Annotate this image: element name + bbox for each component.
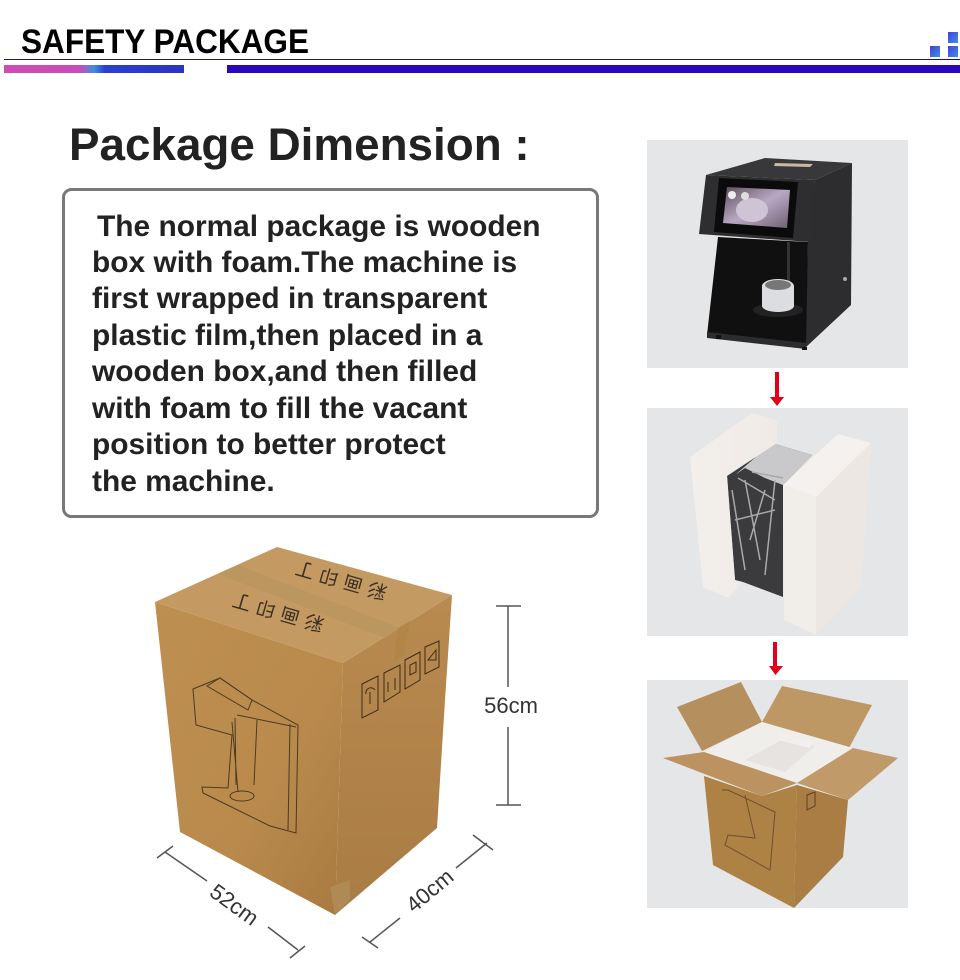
screen bezel	[714, 178, 798, 238]
top printing: 彩画印丁	[224, 586, 326, 635]
header: safety package	[4, 23, 960, 73]
foam block left	[690, 413, 777, 598]
icon: header squares	[930, 32, 958, 57]
top-left flap	[677, 682, 762, 751]
foam block right	[783, 434, 871, 635]
carton handling icons	[362, 641, 439, 718]
description text: position to better protect	[92, 428, 446, 461]
top-right flap	[762, 686, 872, 748]
machine body side	[805, 163, 852, 348]
description text	[91, 210, 540, 498]
description text: wooden box,and then filled	[91, 355, 477, 388]
description text: box with foam.The machine is	[92, 246, 517, 279]
print arm	[787, 242, 790, 287]
text panel: package description	[64, 190, 598, 516]
top printing	[224, 554, 389, 635]
carton icons	[807, 792, 815, 810]
description text: first wrapped in transparent	[92, 282, 487, 315]
header bar right	[227, 65, 960, 73]
dimension: depth 40cm	[362, 835, 493, 948]
carton machine drawing	[193, 678, 298, 833]
machine cavity	[707, 237, 808, 348]
photo panel: opened box	[647, 680, 908, 908]
closed carton	[155, 547, 452, 915]
header title: SAFETY PACKAGE	[21, 23, 309, 61]
label: 40cm: 40cm	[401, 864, 458, 917]
dimension: width 52cm	[157, 846, 305, 958]
carton right face	[335, 595, 452, 915]
machine top	[706, 158, 852, 180]
photo panel: foam	[647, 408, 908, 636]
top printing: 彩画印丁	[287, 554, 389, 603]
dimension: height 56cm	[484, 606, 538, 805]
packing tape	[218, 565, 400, 638]
screen	[723, 187, 790, 228]
label: 56cm: 56cm	[484, 693, 538, 718]
heading: package dimension: Package Dimension :	[69, 119, 530, 170]
platform	[753, 303, 803, 317]
description text: the machine.	[92, 465, 275, 498]
side button	[843, 277, 847, 281]
arrow: step 2 to 3	[769, 642, 783, 675]
cup	[762, 279, 794, 312]
carton top	[155, 547, 452, 663]
arrow: step 1 to 2	[770, 372, 784, 406]
wrapped machine	[727, 443, 812, 597]
box right face	[794, 785, 848, 908]
carton left face	[155, 602, 343, 915]
foam interior	[704, 722, 853, 783]
front-left flap	[663, 752, 797, 796]
description text: with foam to fill the vacant	[91, 392, 467, 425]
machine label	[774, 163, 813, 167]
machine head	[699, 175, 815, 242]
description text: The normal package is wooden	[97, 210, 540, 243]
box left face	[704, 776, 797, 908]
label: 52cm: 52cm	[205, 879, 263, 931]
printed machine outline	[722, 790, 775, 870]
description text: plastic film,then placed in a	[92, 319, 483, 352]
header gradient bar left	[4, 65, 184, 73]
front-right flap	[797, 748, 898, 800]
photo panel: machine	[647, 140, 908, 368]
